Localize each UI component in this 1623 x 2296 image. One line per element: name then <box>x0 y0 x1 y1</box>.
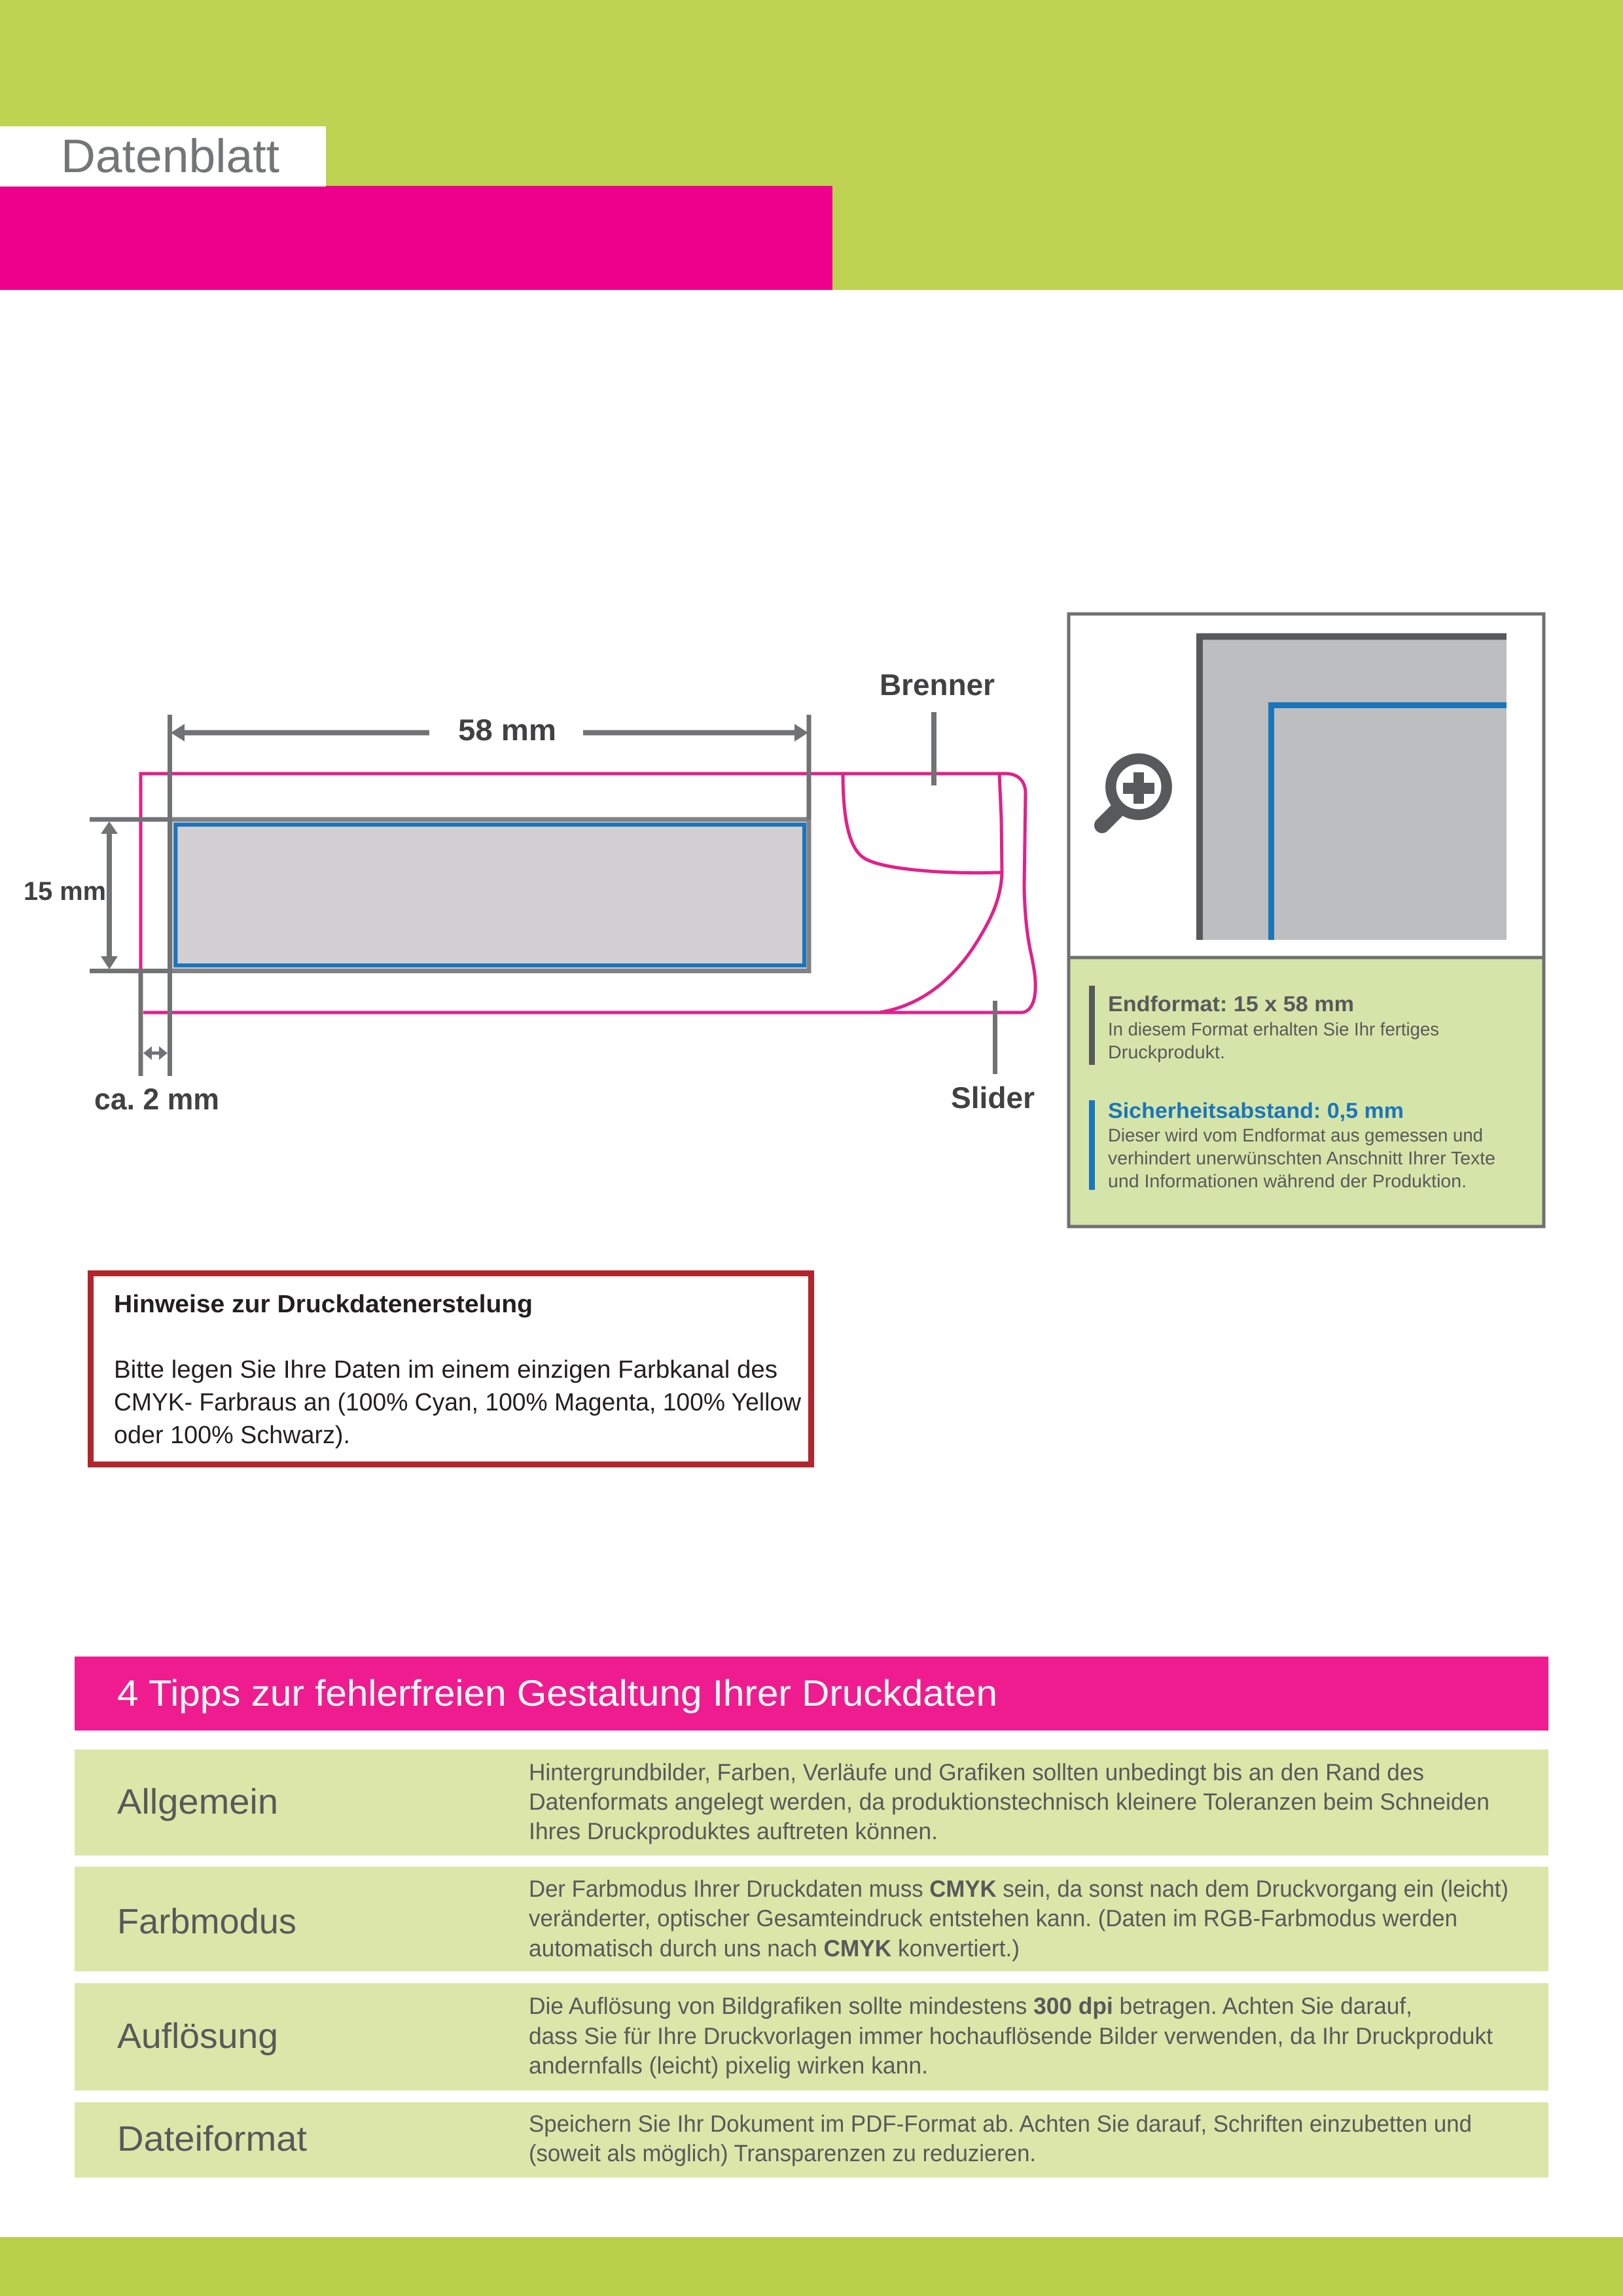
green header background <box>0 0 1623 290</box>
tip row: Dateiformat <box>75 2102 1548 2178</box>
zoomed corner detail <box>1196 634 1507 940</box>
tip row: Auflösung: andernfalls (leicht) pixelig wirken kann. <box>529 2052 928 2079</box>
label: Slider: Slider <box>951 1081 1035 1115</box>
text block: Endformat: Druckprodukt. <box>1108 1042 1225 1062</box>
callout frame <box>90 1274 812 1465</box>
tip row: Dateiformat: (soweit als möglich) Transparenzen zu reduzieren. <box>529 2140 1036 2166</box>
title tab <box>0 126 326 187</box>
callout body: Bitte legen Sie Ihre Daten im einem einzigen Farbkanal des <box>114 1356 777 1384</box>
tip row: Allgemein <box>75 1749 1548 1856</box>
tip row: Farbmodus: veränderter, optischer Gesamteindruck entstehen kann. (Daten im RGB-Farbmodus werden <box>529 1905 1457 1931</box>
callout: print data notes <box>90 1274 812 1465</box>
footer band <box>0 2237 1623 2296</box>
tip row: Auflösung: Auflösung <box>117 2017 278 2056</box>
tips heading bar: 4 Tipps zur fehlerfreien Gestaltung Ihrer Druckdaten <box>117 1672 997 1713</box>
tip row: Farbmodus: Der Farbmodus Ihrer Druckdaten muss CMYK sein, da sonst nach dem Druckvorgang ein (leicht) <box>529 1875 1508 1902</box>
arrow: 15 mm height <box>101 821 118 969</box>
tip row: Auflösung: dass Sie für Ihre Druckvorlagen immer hochauflösende Bilder verwenden, da Ihr Druckprodukt <box>529 2022 1493 2049</box>
tip row: Farbmodus: automatisch durch uns nach CMYK konvertiert.) <box>529 1935 1020 1962</box>
label: 58 mm: 58 mm <box>458 713 556 747</box>
leader line: Slider <box>993 1001 997 1074</box>
header band <box>0 0 1623 290</box>
magenta header block <box>0 186 832 290</box>
panel: tips <box>75 1657 1548 2178</box>
arrow: 2 mm offset <box>143 1046 168 1060</box>
text block: Sicherheitsabstand: Dieser wird vom Endformat aus gemessen und <box>1108 1125 1483 1145</box>
tip row: Farbmodus <box>75 1867 1548 1971</box>
tip row: Dateiformat: Speichern Sie Ihr Dokument im PDF-Format ab. Achten Sie darauf, Schriften einzubetten und <box>529 2110 1472 2137</box>
text block: Sicherheitsabstand: Sicherheitsabstand: 0,5 mm <box>1108 1098 1404 1122</box>
icon: magnifier <box>1102 759 1167 825</box>
dimension lines <box>90 715 809 1076</box>
print area with safety margin <box>170 819 809 971</box>
tips heading bar <box>75 1657 1548 1731</box>
tip row: Allgemein: Ihres Druckproduktes auftreten können. <box>529 1818 938 1844</box>
label: ca. 2 mm: ca. 2 mm <box>94 1082 219 1116</box>
text block: Sicherheitsabstand: und Informationen während der Produktion. <box>1108 1171 1467 1191</box>
text block: Endformat: Endformat: 15 x 58 mm <box>1108 992 1354 1016</box>
tip row: Auflösung <box>75 1983 1548 2090</box>
text block: Endformat <box>1089 986 1439 1065</box>
lighter outline <box>141 774 1035 1013</box>
panel frame <box>1069 614 1544 1227</box>
panel green area <box>1071 960 1542 1225</box>
tip row: Allgemein: Allgemein <box>117 1782 278 1821</box>
callout body: CMYK- Farbraus an (100% Cyan, 100% Magenta, 100% Yellow <box>114 1389 802 1416</box>
arrow: 58 mm width <box>171 724 808 742</box>
tip row: Dateiformat: Dateiformat <box>117 2119 307 2159</box>
callout body <box>114 1356 802 1449</box>
tip row: Allgemein: Datenformats angelegt werden, da produktionstechnisch kleinere Toleranzen beim Schneiden <box>529 1788 1489 1815</box>
tip row: Auflösung: Die Auflösung von Bildgrafiken sollte mindestens 300 dpi betragen. Achten Sie darauf, <box>529 1992 1412 2019</box>
panel: format legend <box>1069 614 1544 1227</box>
technical drawing of lighter <box>24 668 1035 1116</box>
panel divider <box>1071 956 1542 960</box>
tip row: Allgemein: Hintergrundbilder, Farben, Verläufe und Grafiken sollten unbedingt bis an den Rand des <box>529 1759 1424 1785</box>
text block: Sicherheitsabstand <box>1089 1098 1495 1191</box>
title: Datenblatt <box>61 130 279 183</box>
text block: Sicherheitsabstand: verhindert unerwünschten Anschnitt Ihrer Texte <box>1108 1148 1495 1168</box>
tip row: Farbmodus: Farbmodus <box>117 1902 296 1941</box>
callout body: oder 100% Schwarz). <box>114 1422 350 1449</box>
label: Brenner: Brenner <box>880 668 995 702</box>
text block: Endformat: In diesem Format erhalten Sie Ihr fertiges <box>1108 1019 1439 1039</box>
label: 15 mm: 15 mm <box>24 877 106 906</box>
callout heading: Hinweise zur Druckdatenerstelung <box>114 1291 533 1318</box>
leader line: Brenner <box>931 712 936 785</box>
